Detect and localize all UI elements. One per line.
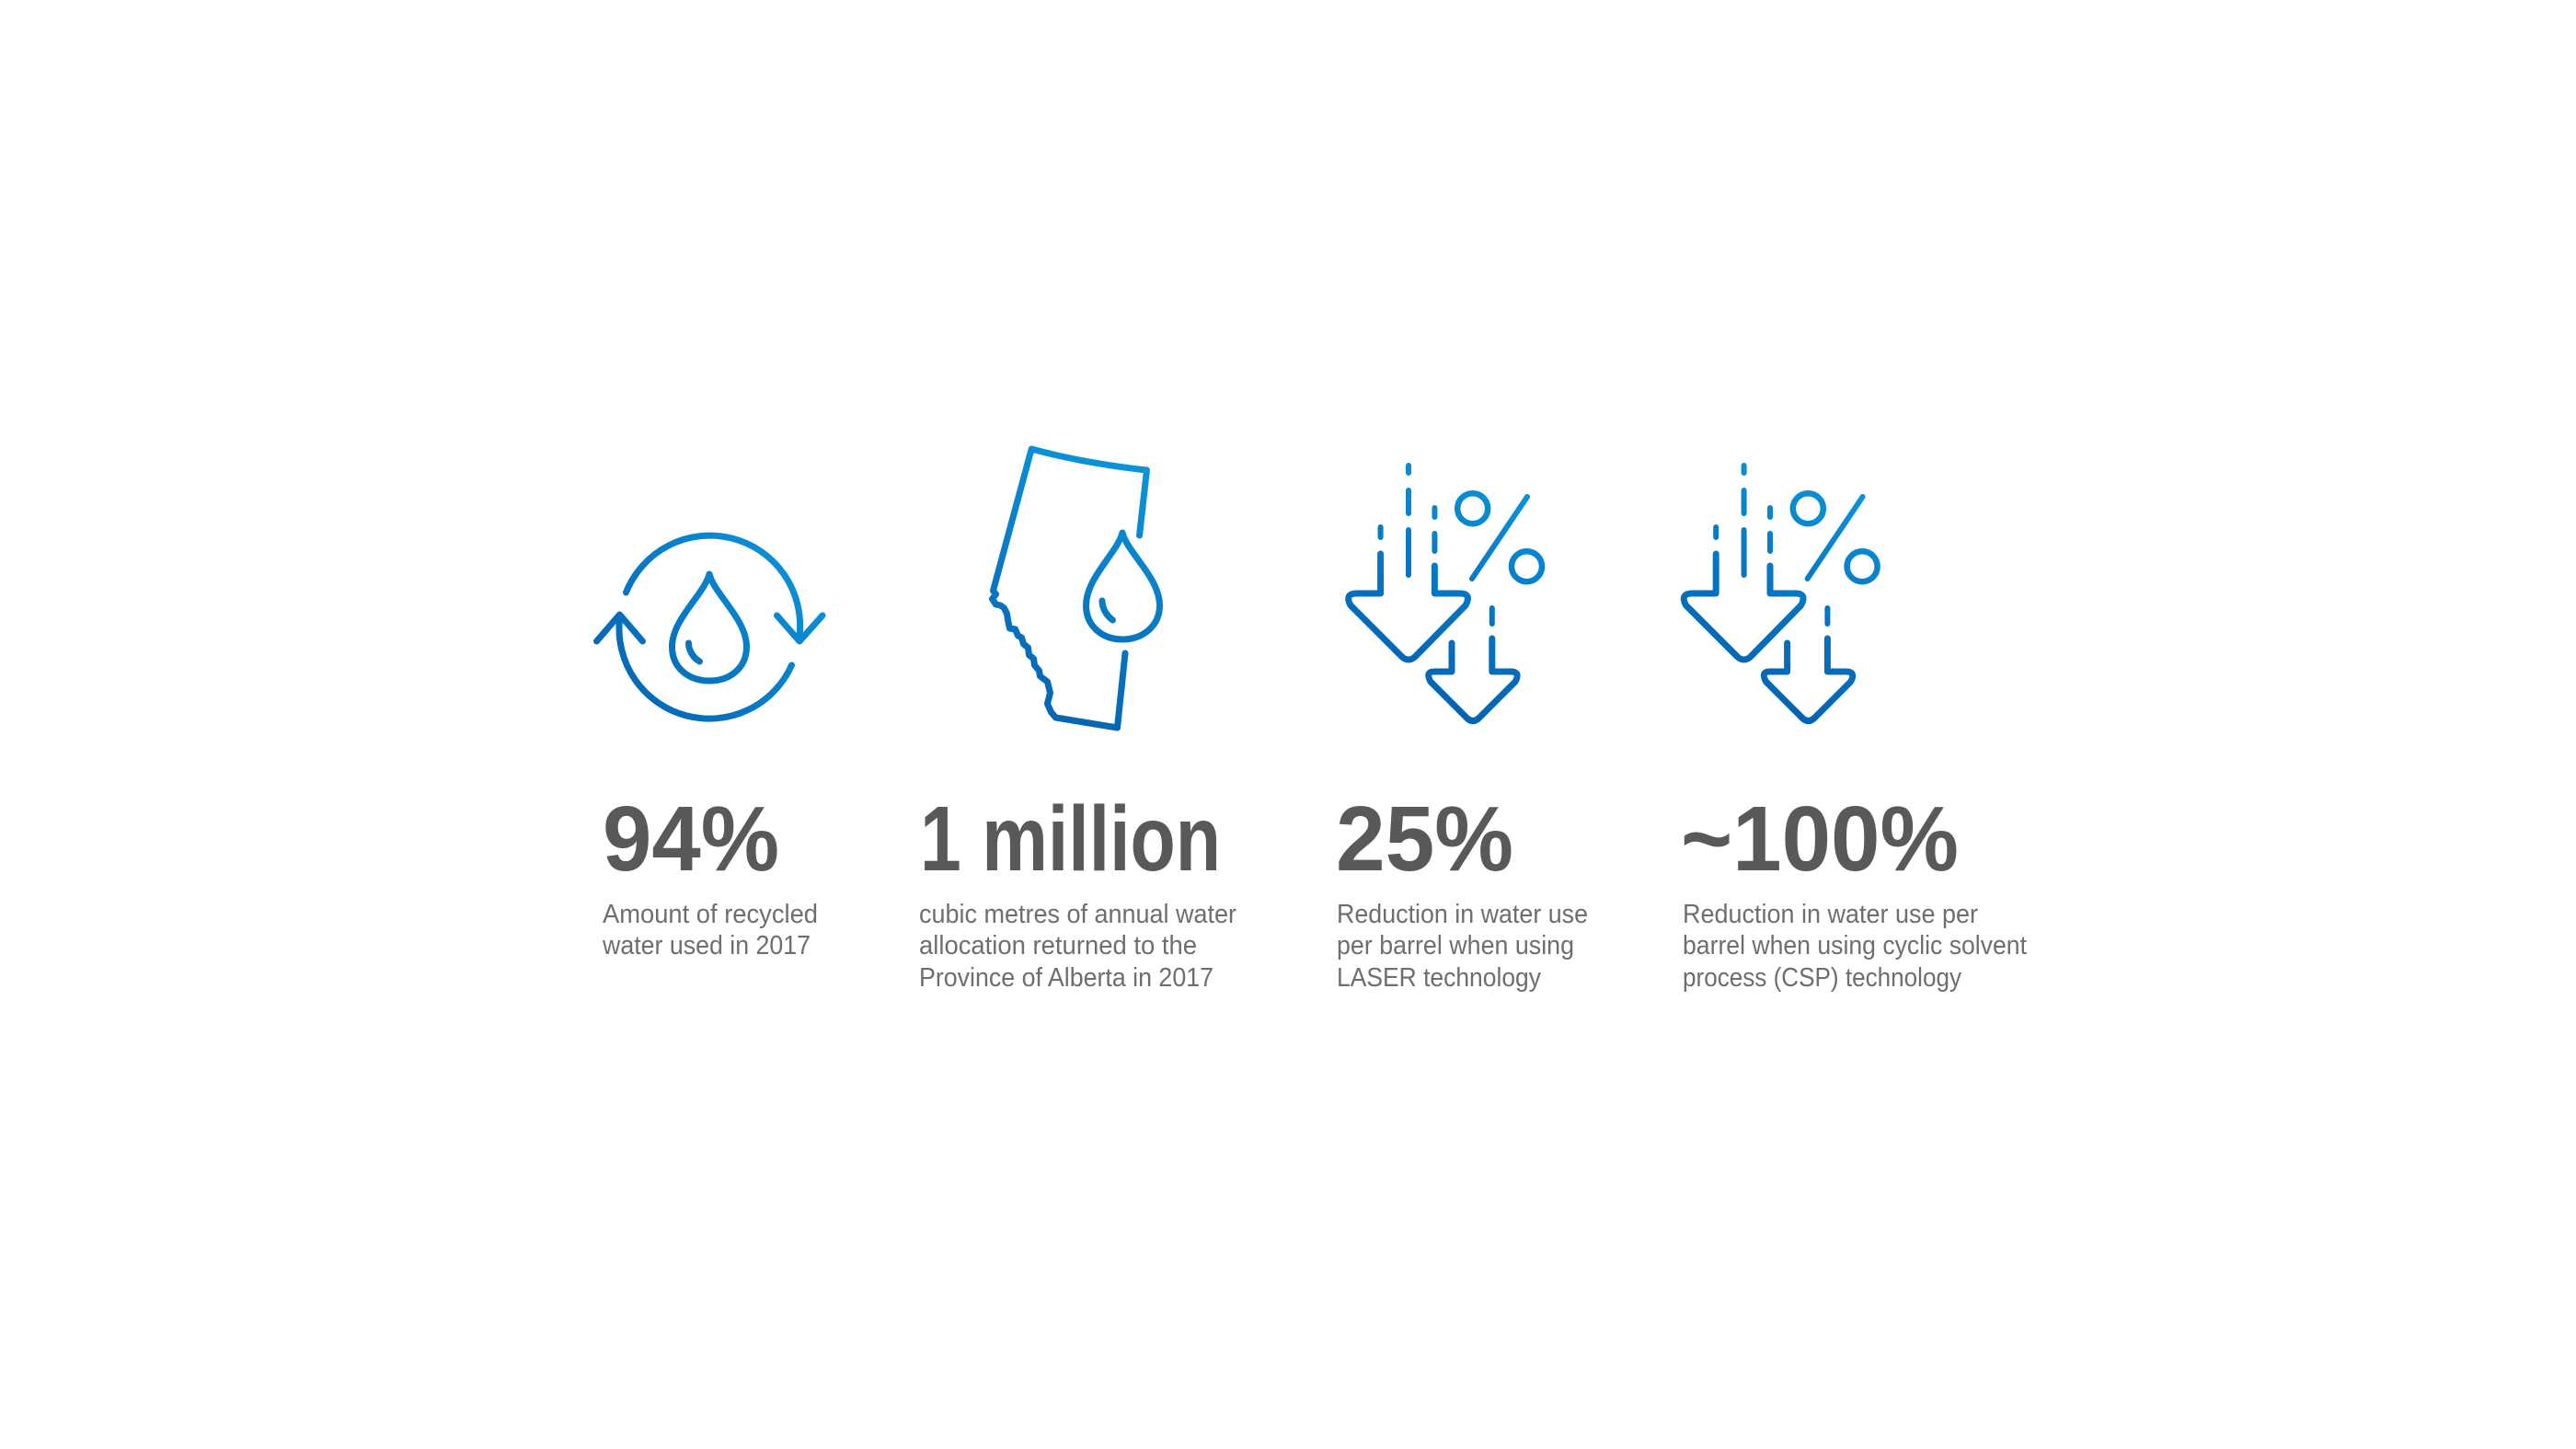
description: CSP (1683, 900, 2027, 993)
icon: falling arrows with percent sign (1684, 466, 1878, 721)
icon: falling arrows with percent sign (1349, 466, 1542, 721)
icon: Alberta map with water drop (992, 449, 1159, 728)
description: LASER (1337, 900, 1588, 993)
panel: CSP reduction (1681, 466, 2027, 993)
icon: water drop in recycling arrows (596, 535, 822, 719)
panel: LASER reduction (1336, 466, 1588, 993)
stat: 25%: 25% (1336, 788, 1513, 891)
description: water allocation (919, 900, 1236, 993)
description: CSP: process (CSP) technology (1683, 963, 1961, 993)
panel: recycled water (596, 535, 822, 960)
panel: water allocation returned (919, 449, 1236, 993)
description: recycled water: water used in 2017 (602, 931, 811, 960)
description: CSP: Reduction in water use per (1683, 900, 1978, 929)
description: LASER: per barrel when using (1337, 931, 1574, 960)
stat: 1 million: 1 million (920, 788, 1221, 891)
description: recycled water: Amount of recycled (603, 900, 818, 929)
description: CSP: barrel when using cyclic solvent (1683, 931, 2027, 960)
description: water allocation: allocation returned to the (919, 931, 1197, 960)
description: LASER: LASER technology (1337, 963, 1541, 993)
description: recycled water (602, 900, 818, 960)
stat: 94%: 94% (603, 788, 779, 891)
description: water allocation: cubic metres of annual water (919, 900, 1236, 929)
description: LASER: Reduction in water use (1337, 900, 1588, 929)
stat: ~100%: ~100% (1681, 788, 1959, 891)
description: water allocation: Province of Alberta in 2017 (919, 963, 1213, 993)
